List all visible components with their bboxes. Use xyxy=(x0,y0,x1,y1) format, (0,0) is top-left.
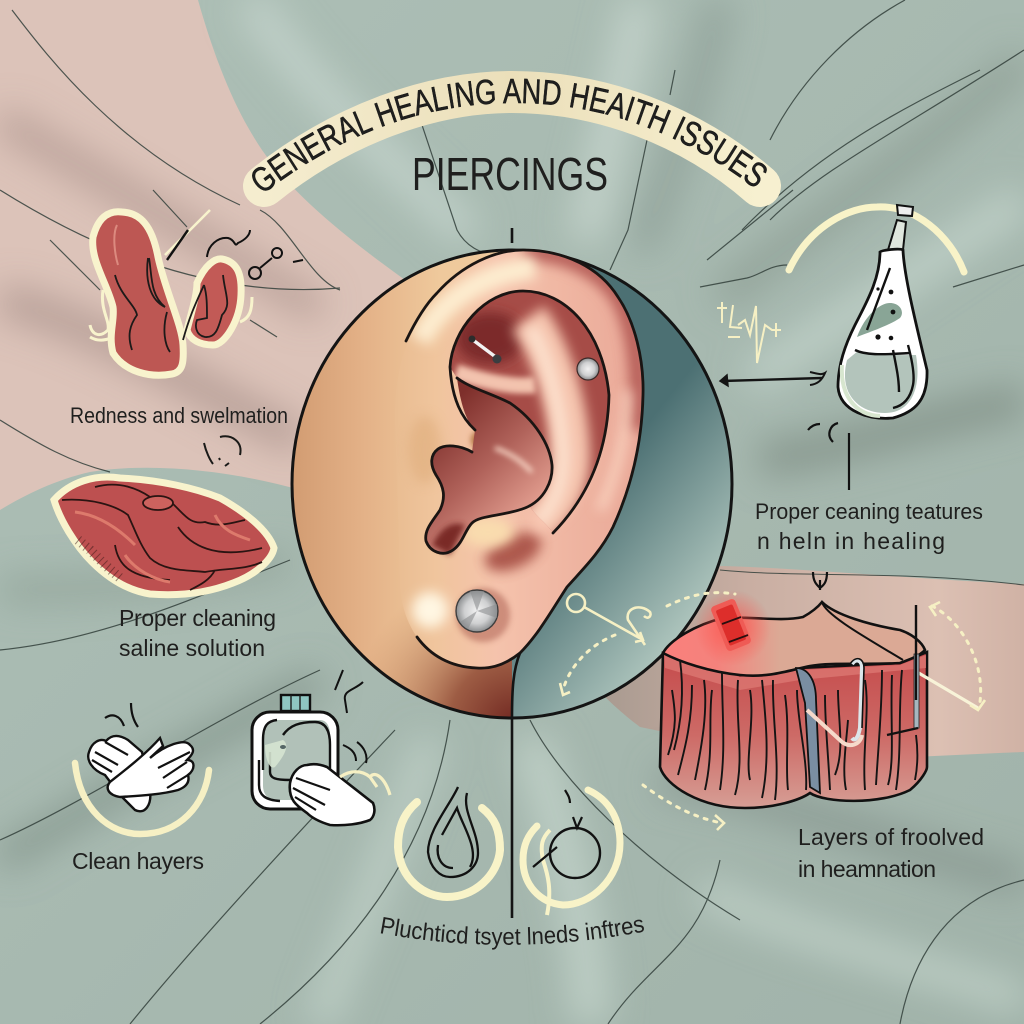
center lines xyxy=(512,228,520,918)
piercing: barbell top xyxy=(468,336,502,364)
arrow: double headed xyxy=(720,372,825,386)
ear outlines xyxy=(406,250,643,668)
arrows: dotted curved xyxy=(563,593,981,823)
icon: saline bottle with hand xyxy=(252,670,390,825)
label: proper cleaning right line 2: n heln in healing xyxy=(757,528,945,554)
circle left half: skin xyxy=(292,250,512,718)
icon: crossed hands xyxy=(75,703,209,834)
icon: flask with arc xyxy=(789,205,964,418)
label: redness: Redness and swelmation xyxy=(70,403,288,428)
icon: pin and hook on circle xyxy=(567,594,651,645)
icon: droplet in ring xyxy=(398,787,500,897)
icon: ring in ring xyxy=(523,790,620,915)
label: layers line 1: Layers of froolved xyxy=(798,824,984,850)
arrowheads on dotted curves xyxy=(560,602,985,830)
piercing: lobe stud xyxy=(456,590,498,632)
label: proper cleaning right line 1: Proper ceaning teatures xyxy=(755,499,983,524)
label: clean hayers: Clean hayers xyxy=(72,848,204,874)
label: saline: saline solution xyxy=(119,635,265,661)
illustration: skin layers block xyxy=(660,572,978,808)
icon: pulse sparkle xyxy=(717,302,781,363)
label: practiced: Pluchticd tsyet lneds inftres xyxy=(380,917,644,950)
icon: tissue patch xyxy=(54,477,274,595)
icon: inflamed ear fragments xyxy=(90,210,303,375)
title banner xyxy=(243,71,781,207)
piercing: upper stud xyxy=(577,358,599,380)
label: layers line 2: in heamnation xyxy=(798,856,936,882)
icon: marks under flask xyxy=(808,423,849,490)
ear shape xyxy=(395,250,643,668)
label: proper cleaning left: Proper cleaning xyxy=(119,605,276,631)
illustration: ear in circle xyxy=(292,228,732,918)
ear upper inner hollow xyxy=(450,291,609,533)
ear concha xyxy=(426,378,552,555)
title: GENERAL HEALING AND HEAITH ISSUES xyxy=(252,78,767,191)
icon: squiggle xyxy=(204,436,240,466)
subtitle: PIERCINGS xyxy=(412,148,608,200)
circle right half: teal xyxy=(512,250,732,718)
